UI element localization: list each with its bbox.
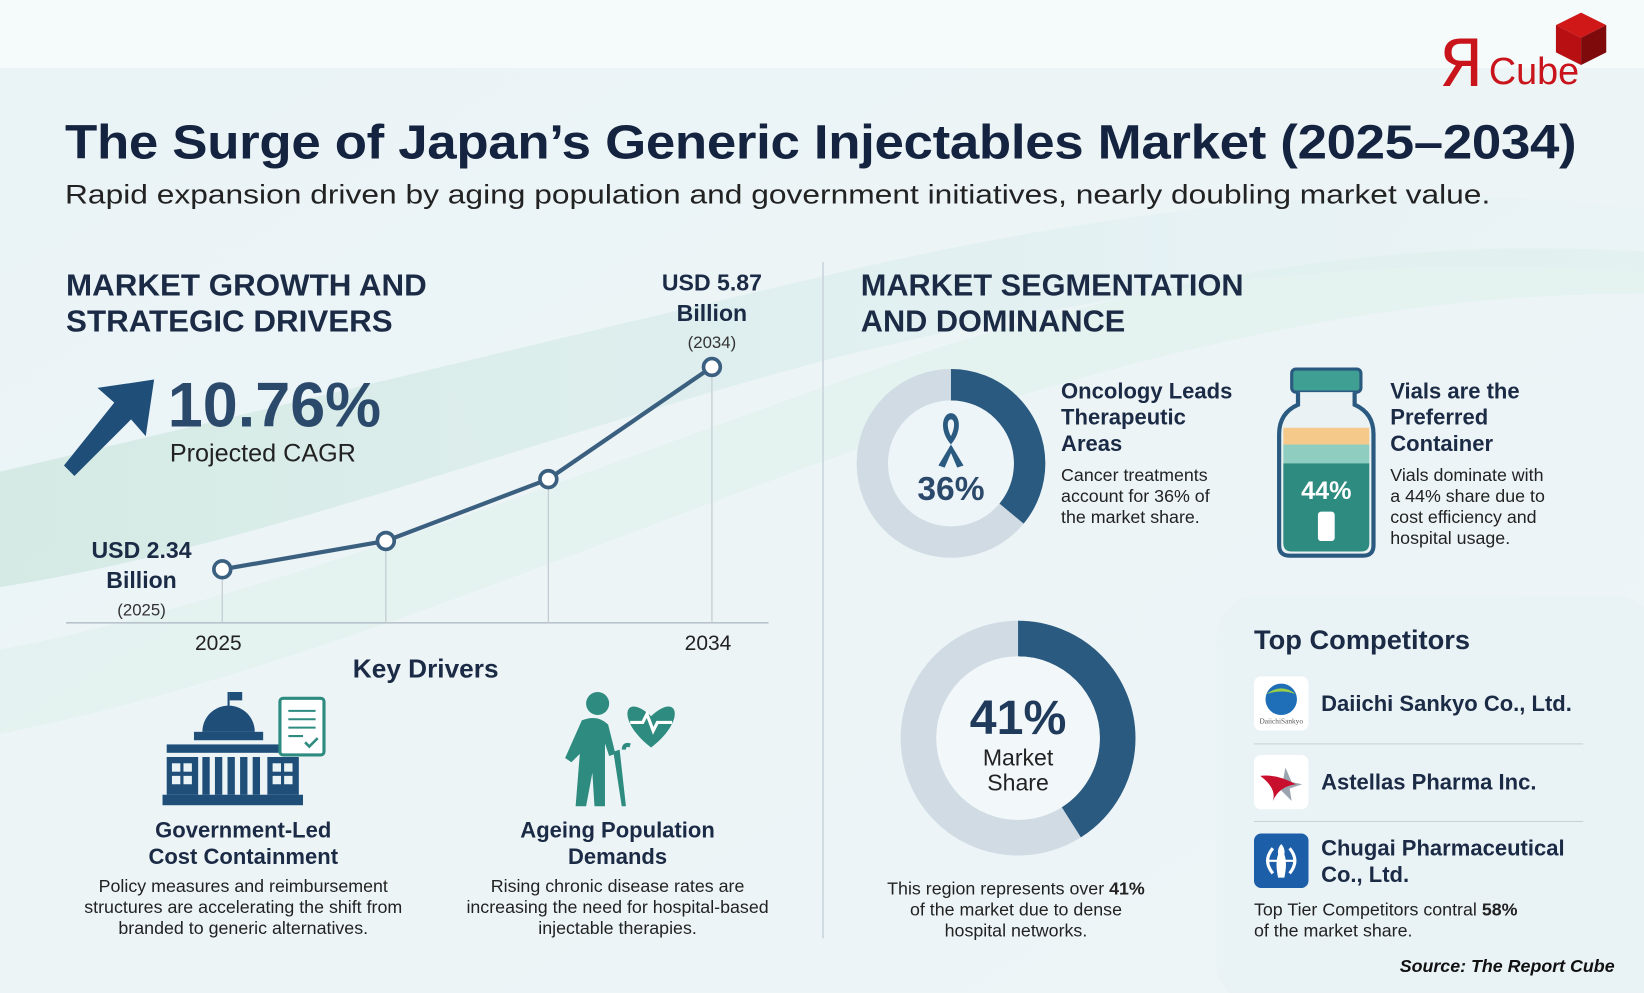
competitor: chugai: Chugai Pharmaceutical <box>1321 837 1565 861</box>
source: Source: The Report Cube <box>1400 956 1615 976</box>
text: competitor share: Top Tier Competitors contral 58% <box>1254 900 1517 920</box>
axis labels: 2025 <box>195 632 242 655</box>
donut: regional 41%: Share <box>987 770 1049 796</box>
driver: government <box>84 819 402 938</box>
logo <box>1439 12 1606 102</box>
icon: growth arrow <box>64 380 154 476</box>
competitor: daiichi: DaiichiSankyo <box>1259 716 1303 725</box>
logo: Cube <box>1489 49 1579 92</box>
text: vials <box>1390 380 1545 548</box>
label: 2025 value: USD 2.34 <box>92 537 192 563</box>
competitor: astellas: Astellas Pharma Inc. <box>1321 771 1536 795</box>
heading: market growth: STRATEGIC DRIVERS <box>66 305 393 339</box>
label: 2034 value: Billion <box>677 300 747 326</box>
icon: elderly person with heart <box>565 692 675 806</box>
driver: ageing: Demands <box>568 845 667 869</box>
icon: government building <box>162 692 326 806</box>
text: vials: hospital usage. <box>1390 528 1510 548</box>
label: 2025 value: (2025) <box>117 602 166 620</box>
driver: government: branded to generic alternatives. <box>118 918 368 938</box>
text: vials: Preferred <box>1390 406 1488 430</box>
driver: government: Government-Led <box>155 819 331 843</box>
axis labels: 2034 <box>685 632 731 655</box>
competitor: daiichi: Daiichi Sankyo Co., Ltd. <box>1321 692 1572 716</box>
competitor: chugai <box>1254 834 1565 888</box>
text: oncology <box>1061 380 1232 527</box>
axis labels <box>195 632 731 655</box>
label: 2034 value: (2034) <box>688 334 736 352</box>
donut: regional 41%: 41% <box>970 691 1066 745</box>
heading: segmentation: AND DOMINANCE <box>861 305 1125 339</box>
text: competitor share <box>1254 900 1517 940</box>
heading: market growth <box>66 269 427 339</box>
panel: top competitors <box>1254 624 1584 940</box>
driver: ageing: injectable therapies. <box>538 918 697 938</box>
caption: region: of the market due to dense <box>910 900 1122 920</box>
donut: oncology 36%: 36% <box>917 471 985 508</box>
line chart <box>66 356 768 624</box>
text: oncology: Therapeutic <box>1061 406 1186 430</box>
text: vials: Vials dominate with <box>1390 466 1544 485</box>
text: oncology: Cancer treatments <box>1061 466 1208 485</box>
caption: region <box>887 879 1145 940</box>
heading: key drivers: Key Drivers <box>353 654 499 684</box>
CAGR stat: 10.76% <box>168 370 381 440</box>
driver: ageing: Ageing Population <box>520 819 715 843</box>
label: 2034 value <box>662 269 762 352</box>
subtitle: Rapid expansion driven by aging population and government initiatives, nearly doubling market value. <box>65 178 1490 210</box>
heading: segmentation <box>861 269 1244 339</box>
competitor: daiichi <box>1254 676 1572 730</box>
icon: vial 44% <box>1277 368 1376 558</box>
driver: ageing <box>466 819 769 938</box>
heading: segmentation: MARKET SEGMENTATION <box>861 269 1244 303</box>
text: vials: Container <box>1390 432 1493 456</box>
label: 2025 value <box>92 537 192 620</box>
competitor: chugai: Co., Ltd. <box>1321 863 1409 887</box>
CAGR stat: Projected CAGR <box>170 439 356 468</box>
text: vials: Vials are the <box>1390 380 1520 404</box>
title: The Surge of Japan’s Generic Injectables Market (2025–2034) <box>65 114 1576 169</box>
driver: ageing: Rising chronic disease rates are <box>491 877 744 896</box>
donut: oncology 36% <box>856 369 1046 558</box>
text: vials: a 44% share due to <box>1390 486 1545 506</box>
competitor: astellas <box>1254 755 1536 810</box>
text: vials: cost efficiency and <box>1390 507 1537 527</box>
text: oncology: Oncology Leads <box>1061 380 1232 404</box>
driver: government: structures are accelerating the shift from <box>84 897 402 917</box>
donut: regional 41% <box>900 620 1136 856</box>
caption: region: This region represents over 41% <box>887 879 1145 899</box>
driver: government: Cost Containment <box>148 845 338 869</box>
text: oncology: Areas <box>1061 432 1122 456</box>
heading: top competitors: Top Competitors <box>1254 624 1470 655</box>
label: 2025 value: Billion <box>106 567 177 593</box>
logo: Я <box>1439 25 1484 102</box>
icon: vial 44%: 44% <box>1301 477 1351 505</box>
driver: ageing: increasing the need for hospital-based <box>466 897 769 917</box>
text: oncology: the market share. <box>1061 507 1200 527</box>
caption: region: hospital networks. <box>945 921 1087 940</box>
donut: regional 41%: Market <box>983 744 1054 770</box>
text: competitor share: of the market share. <box>1254 921 1412 940</box>
driver: government: Policy measures and reimbursement <box>99 877 388 896</box>
text: oncology: account for 36% of <box>1061 486 1210 506</box>
label: 2034 value: USD 5.87 <box>662 269 762 296</box>
heading: market growth: MARKET GROWTH AND <box>66 269 427 303</box>
